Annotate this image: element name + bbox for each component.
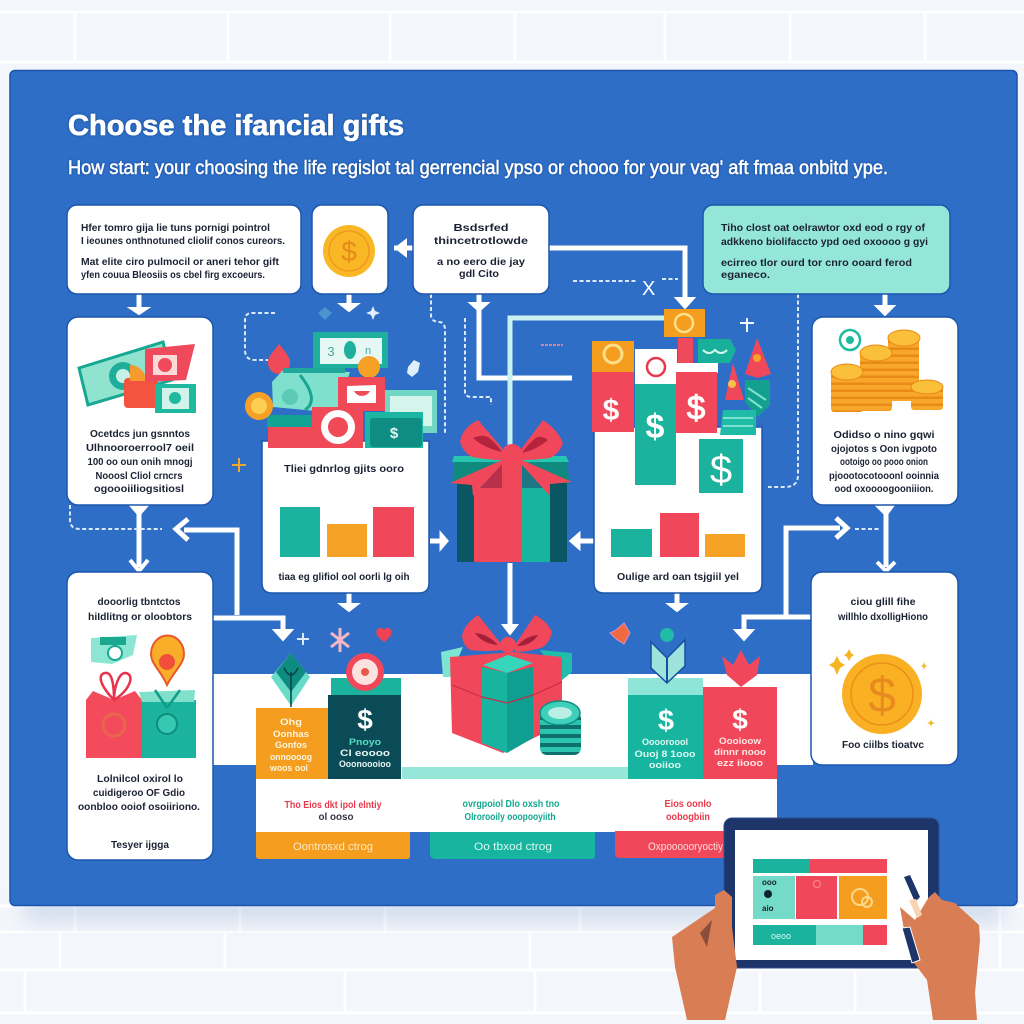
button: red: Oxpoooooryoctiy [648, 841, 723, 853]
illustration: centre gift box [450, 420, 572, 562]
panel: gifts card left [67, 572, 213, 860]
connector arrows [130, 238, 895, 640]
panel: mint text: Tiho clost oat oelrawtor oxd eod o rgy of [721, 222, 926, 234]
panel: coins card right: Odidso o nino gqwi [834, 429, 935, 441]
panel: orange label block: Ohg [280, 717, 302, 728]
tablet: aio [762, 904, 774, 913]
illustration: dollar blocks and trees: $ [646, 408, 665, 446]
panel: intro text: Mat elite ciro pulmocil or aneri tehor gift [81, 256, 279, 268]
bottom captions: Olrorooily ooopooyiith [464, 812, 556, 823]
panel: orange label block: woos ool [269, 763, 308, 774]
illustration: dollar blocks and trees: $ [603, 394, 620, 427]
panel: intro text: yfen couua Bleosiis os cbel firg excoeurs. [81, 269, 265, 281]
panel: red label block: ezz iiooo [717, 758, 764, 768]
tablet: oeoo [771, 931, 791, 941]
panel: dark teal label block: Ooonoooioo [339, 759, 391, 769]
hands and pen [672, 875, 980, 1020]
panel: orange label block: onnoooog [270, 752, 312, 763]
illustration: money pile: n [365, 345, 371, 357]
bottom captions [284, 799, 712, 823]
icon: large gold coin: $ [868, 667, 896, 723]
icon: cash and envelopes [79, 342, 196, 413]
panel: dark teal label block: $ [357, 704, 373, 735]
panel: cash card left: Ocetdcs jun gsnntos [90, 428, 190, 440]
panel: cash card left: 100 oo oun onih mnogj [88, 456, 193, 468]
illustration: teal coin stack [540, 701, 581, 755]
button: teal [430, 832, 595, 859]
panel: cash card left: ogoooiiliogsitiosl [94, 483, 184, 495]
subtitle: How start: your choosing the life regislot tal gerrencial ypso or chooo for your vag' aft fmaa onbitd ype. [68, 158, 888, 179]
panel: orange label block: Oonhas [273, 729, 309, 740]
bottom captions: Tho Eios dkt ipol elntiy [284, 800, 382, 811]
illustration: dollar blocks and trees: $ [710, 448, 732, 492]
dashed guide lines [70, 278, 880, 529]
bar chart: left: Tliei gdnrlog gjits ooro [284, 463, 404, 475]
bar chart: right [594, 427, 762, 593]
panel: coins card right: ood oxoooogooniiion. [834, 483, 934, 495]
illustration: dollar blocks and trees: $ [687, 389, 705, 426]
button: red [615, 831, 730, 858]
panel: cash card left [67, 317, 213, 505]
panel: red label block: Oooioow [719, 736, 762, 746]
tablet [724, 818, 939, 968]
panel: gifts card left: oonbloo ooiof osoiiriono. [78, 801, 200, 813]
panel: red label block: $ [732, 704, 748, 735]
panel: coin card right: willhlo dxolligHiono [837, 611, 928, 623]
bottom captions: oobogbiin [666, 812, 710, 823]
button: orange: Oontrosxd ctrog [293, 841, 373, 853]
panel: gifts card left: dooorlig tbntctos [98, 596, 181, 608]
panel: teal label block: Ooooroool [642, 737, 688, 747]
panel: gifts card left: Lolnilcol oxirol lo [97, 773, 183, 785]
panel: coins card right [812, 317, 958, 505]
panel: bottom white band [213, 674, 813, 832]
illustration: money pile [232, 306, 437, 472]
panel: gifts card left: cuidigeroo OF Gdio [93, 787, 185, 799]
panel: dark teal label block: Pnoyo [349, 737, 382, 747]
panel: coin icon card [312, 205, 388, 294]
panel: mint text [703, 205, 950, 294]
panel: teal label block [628, 678, 703, 779]
panel: mint text: ecirreo tlor ourd tor cnro ooard ferod [721, 257, 912, 269]
panel: centre top text: thincetrotlowde [434, 235, 528, 247]
tablet: ooo [762, 878, 777, 887]
button: teal: Oo tbxod ctrog [474, 841, 552, 853]
panel: cash card left: Nooosl Cliol crncrs [96, 470, 183, 482]
illustration: money pile: 3 [327, 344, 335, 359]
panel: mint text: eganeco. [721, 269, 770, 281]
icon: large gold coin [829, 649, 935, 734]
panel: intro text: I ieounes onthnotuned cliolif conos cureors. [81, 235, 285, 247]
bottom captions: Eios oonlo [664, 799, 712, 810]
bar chart: left [262, 441, 429, 593]
panel: teal label block: ooiioo [649, 760, 682, 770]
panel: dark teal label block: Cl eoooo [340, 748, 391, 758]
bottom captions: ovrgpoiol Dlo oxsh tno [462, 799, 560, 810]
bottom captions: ol ooso [318, 812, 354, 823]
icon: book and flower [651, 628, 760, 687]
panel: intro text [67, 205, 301, 294]
panel: coin card right: Foo ciilbs tioatvc [842, 739, 924, 751]
panel: centre top text [413, 205, 549, 294]
panel: coins card right: pjoootocotooonl ooinnia [829, 470, 939, 482]
panel: orange label block [256, 708, 328, 779]
panel: orange label block: Gonfos [275, 740, 307, 751]
panel: teal label block: Ouoj 8 1ooo [634, 749, 696, 759]
panel: centre top text: a no eero die jay [437, 256, 525, 268]
panel: coin card right: ciou glill fihe [850, 596, 916, 608]
dashed guide lines: X [642, 278, 655, 300]
icon: gift envelopes [86, 635, 196, 758]
panel: cash card left: Ulhnooroerrool7 oeil [86, 442, 194, 454]
panel: centre top text: gdl Cito [459, 268, 499, 280]
panel: centre top text: Bsdsrfed [454, 222, 508, 234]
button: orange [256, 832, 410, 859]
panel: red label block: dinnr nooo [714, 747, 767, 757]
bar chart: left: tiaa eg glifiol ool oorli lg oih [278, 571, 410, 583]
panel: gifts card left: Tesyer ijgga [111, 839, 169, 851]
panel: intro text: Hfer tomro gija lie tuns pornigi pointrol [81, 222, 270, 234]
panel: coins card right: ojojotos s Oon ivgpoto [831, 443, 937, 455]
panel: teal label block: $ [658, 705, 674, 737]
icon: sparkles and heart [297, 623, 630, 652]
panel: mint text: adkkeno biolifaccto ypd oed oxoooo g gyi [721, 236, 928, 248]
icon: red token and leaf [271, 653, 384, 707]
title: Choose the ifancial gifts [68, 110, 404, 142]
panel: gifts card left: hiIdlitng or oloobtors [88, 611, 192, 623]
illustration: money pile: $ [390, 425, 399, 442]
panel: red label block [703, 687, 777, 779]
panel: coin icon card: $ [341, 236, 357, 267]
icon: coin stacks [831, 330, 943, 412]
bar chart: right: Oulige ard oan tsjgiil yel [617, 571, 739, 583]
panel: coins card right: ootoigo oo pooo onion [840, 456, 928, 468]
illustration: bottom gift box [441, 615, 572, 753]
panel: coin card right [811, 572, 958, 765]
illustration: dollar blocks and trees [541, 309, 771, 493]
panel: dark teal label block [328, 678, 401, 779]
